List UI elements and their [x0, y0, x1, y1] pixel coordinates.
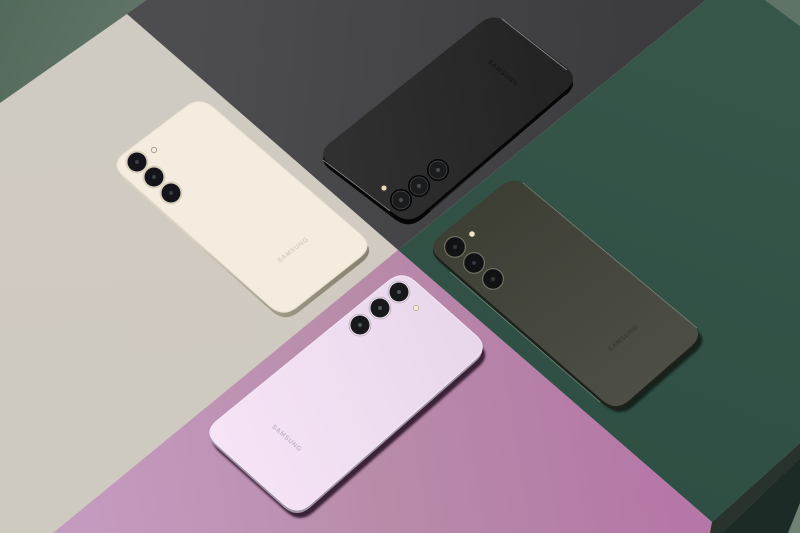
black flash [381, 185, 387, 191]
cream phone back [117, 102, 367, 312]
cream camera 1 [126, 150, 148, 174]
lilac camera 1 [349, 314, 371, 336]
phone: olive [433, 181, 702, 412]
olive camera 2 [463, 252, 485, 274]
cream flash [151, 147, 157, 153]
lilac camera 3 [388, 281, 410, 303]
cream camera 2 [142, 166, 166, 188]
background: block side and shadow at bottom right [710, 443, 800, 533]
background: top-right pale green corner [765, 0, 800, 26]
olive phone edge highlights [450, 183, 697, 402]
background: green block [398, 0, 800, 522]
background: top-left green block [0, 0, 200, 110]
olive phone shadow [437, 187, 702, 412]
phone: black [323, 18, 573, 224]
olive logo: SAMSUNG [607, 324, 640, 353]
olive phone back [433, 181, 698, 406]
black phone back [323, 18, 573, 219]
lilac phone back [210, 276, 482, 510]
black phone side frame [323, 23, 573, 224]
lilac logo: SAMSUNG [270, 423, 303, 453]
black camera 3 [427, 159, 449, 181]
cream phone side frame [119, 107, 369, 317]
phone: cream [117, 102, 369, 317]
background: pink block [53, 250, 712, 533]
cream camera 3 [160, 182, 182, 204]
background: charcoal block [127, 0, 706, 250]
lilac flash [414, 306, 418, 310]
olive flash [469, 231, 475, 237]
olive camera 1 [444, 236, 466, 258]
lilac phone side frame [210, 279, 482, 513]
phone: lilac [210, 276, 485, 518]
black logo: SAMSUNG [486, 59, 519, 88]
background: beige block [0, 14, 398, 533]
cream logo: SAMSUNG [276, 236, 310, 265]
lilac camera 2 [369, 297, 391, 319]
black phone edge highlights [323, 19, 567, 211]
olive camera 3 [482, 268, 504, 290]
black camera 2 [408, 175, 430, 197]
lilac phone shadow [213, 284, 485, 518]
black camera 1 [390, 189, 412, 211]
olive phone side frame [433, 184, 698, 409]
